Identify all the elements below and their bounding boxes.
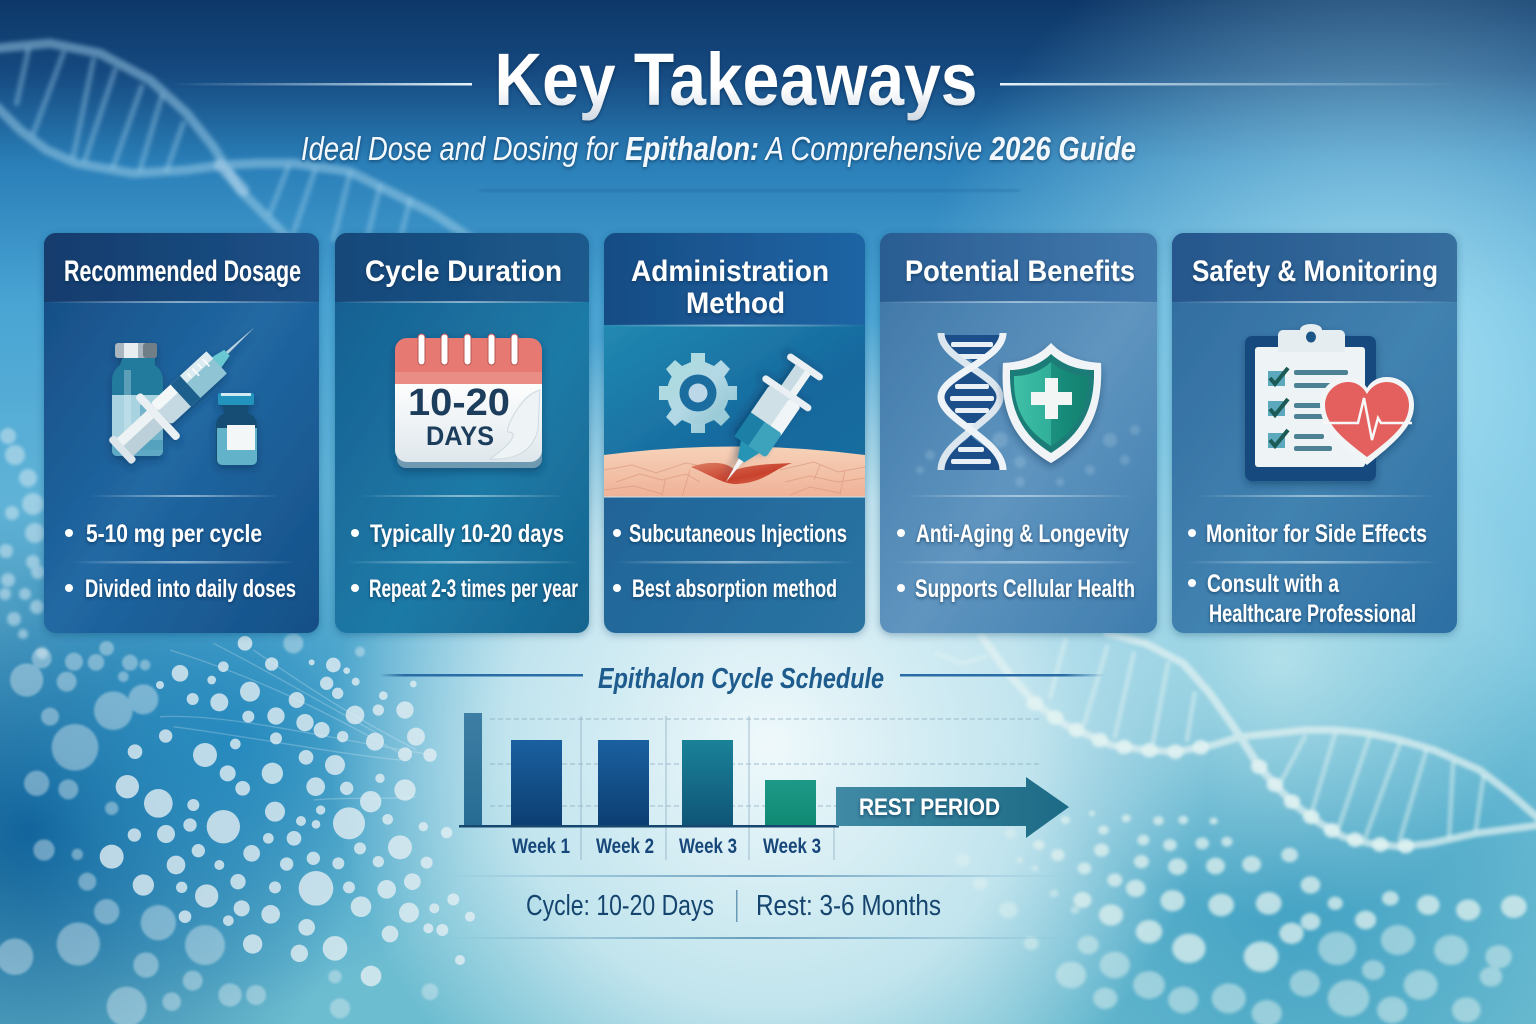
heading: cycle duration	[335, 233, 589, 303]
summary: cycle and rest	[450, 875, 1060, 939]
icon: calendar: 10-20	[408, 382, 510, 424]
week labels: Week 3	[679, 835, 737, 858]
icon: calendar	[395, 334, 542, 468]
heading: recommended dosage: Recommended Dosage	[64, 255, 301, 288]
icon: calendar: DAYS	[426, 421, 494, 451]
bar: tall	[464, 713, 482, 825]
heading: administration method: Administration	[631, 255, 829, 288]
week labels	[512, 835, 821, 858]
bullets: cycle: Repeat 2-3 times per year	[369, 575, 578, 603]
summary: cycle and rest: Cycle: 10-20 Days	[526, 890, 714, 922]
bar chart: cycle schedule	[459, 713, 1069, 860]
icon: dna and shield	[916, 333, 1140, 487]
heading: administration method	[604, 233, 865, 325]
heading: potential benefits	[880, 233, 1157, 303]
arrow: rest period	[836, 777, 1069, 838]
subtitle	[301, 130, 1136, 192]
panel: recommended dosage	[44, 233, 319, 633]
heading: safety and monitoring: Safety & Monitoring	[1192, 255, 1438, 288]
bullets: safety: Consult with a	[1207, 570, 1340, 598]
week labels: Week 2	[596, 835, 654, 858]
bullets: cycle	[345, 520, 580, 603]
panel: potential benefits	[880, 233, 1157, 633]
heading: administration method: Method	[686, 287, 785, 320]
panel: administration method	[604, 233, 865, 633]
bar: week 1	[511, 740, 562, 825]
bullets: administration: Best absorption method	[632, 575, 837, 603]
bullets: safety	[1185, 520, 1440, 628]
week labels: Week 3	[763, 835, 821, 858]
bullets: dosage: 5-10 mg per cycle	[86, 520, 262, 548]
heading: potential benefits: Potential Benefits	[905, 255, 1135, 288]
bullets: dosage	[65, 520, 296, 603]
title: Key Takeaways	[494, 38, 978, 121]
panel: safety and monitoring	[1172, 233, 1457, 633]
bar: week 3	[682, 740, 733, 825]
section heading: cycle schedule: Epithalon Cycle Schedule	[598, 663, 884, 695]
panel: cycle duration	[335, 233, 589, 633]
arrow: rest period: REST PERIOD	[859, 794, 1000, 821]
heading: safety and monitoring	[1172, 233, 1457, 303]
bar: week 3 short	[765, 780, 816, 825]
summary: cycle and rest: Rest: 3-6 Months	[756, 890, 941, 922]
bullets: administration	[613, 520, 855, 603]
bullets: cycle: Typically 10-20 days	[370, 520, 564, 548]
bullets: safety: Healthcare Professional	[1209, 600, 1416, 628]
bullets: administration: Subcutaneous Injections	[629, 520, 847, 548]
subtitle: Ideal Dose and Dosing for Epithalon: A Comprehensive 2026 Guide	[301, 130, 1136, 167]
bullets: benefits	[895, 520, 1140, 603]
icon: clipboard and heart	[1245, 324, 1414, 481]
icon: gear, syringe and skin	[604, 324, 865, 499]
icon: vials and syringe	[99, 305, 275, 474]
bullets: benefits: Supports Cellular Health	[915, 575, 1135, 603]
heading: cycle duration: Cycle Duration	[365, 255, 562, 288]
bullets: benefits: Anti-Aging & Longevity	[916, 520, 1129, 548]
bar: week 2	[598, 740, 649, 825]
bullets: dosage: Divided into daily doses	[85, 575, 296, 603]
bullets: safety: Monitor for Side Effects	[1206, 520, 1427, 548]
week labels: Week 1	[512, 835, 570, 858]
heading: recommended dosage	[44, 233, 319, 303]
